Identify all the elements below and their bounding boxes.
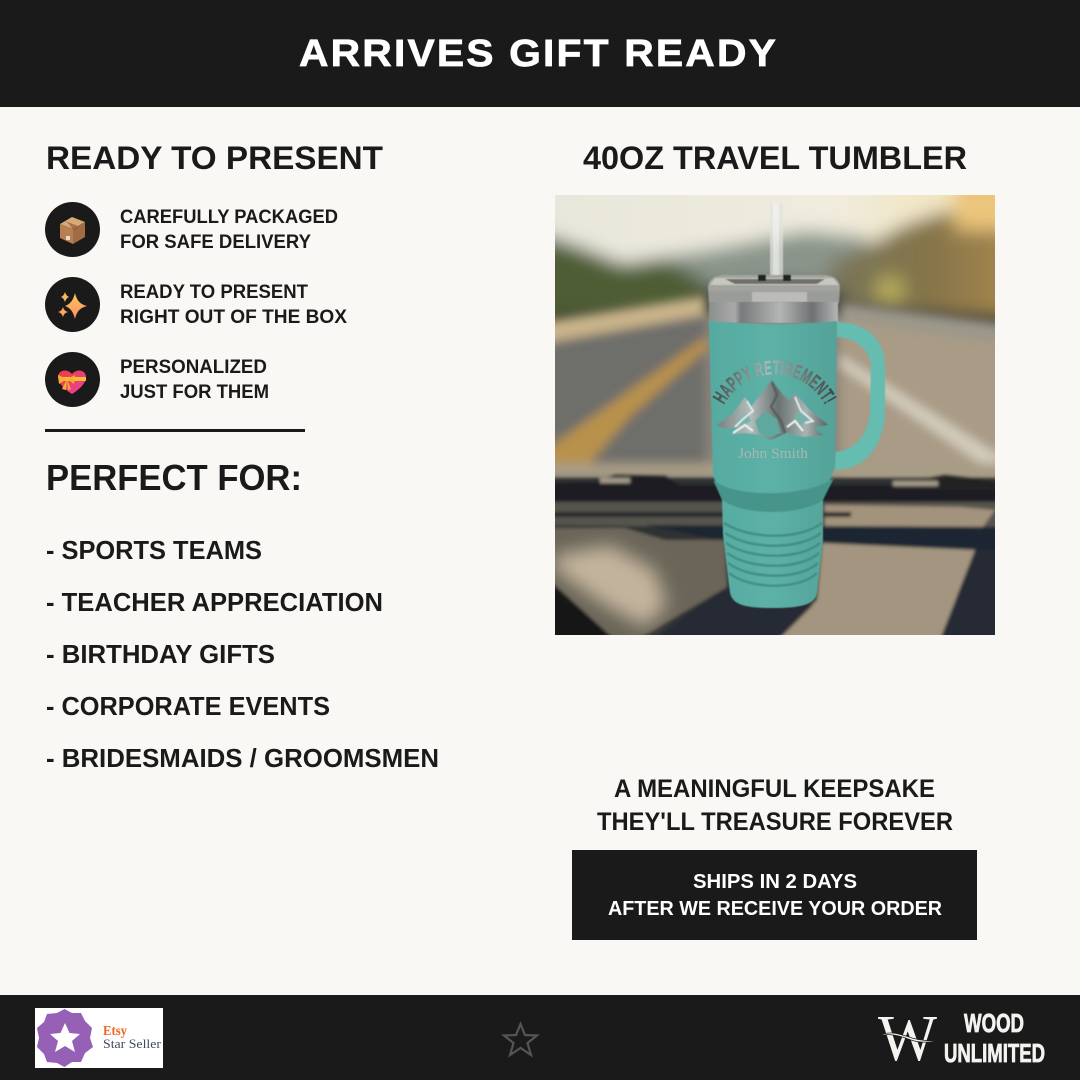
product photo: tumbler on car dashboard [555, 195, 995, 635]
tagline: THEY'LL TREASURE FOREVER [597, 808, 953, 836]
list: occasions: - BRIDESMAIDS / GROOMSMEN [46, 743, 439, 773]
title: ARRIVES GIFT READY [299, 33, 778, 75]
footer bar [0, 995, 1080, 1080]
heading: ready to present: READY TO PRESENT [46, 140, 383, 176]
text: carefully packaged: CAREFULLY PACKAGED [120, 207, 338, 228]
badge: etsy star seller: Etsy [103, 1024, 127, 1039]
text: personalized: PERSONALIZED [120, 357, 267, 378]
icon: outline star [504, 1024, 537, 1055]
text: personalized: JUST FOR THEM [120, 382, 269, 403]
tagline [597, 775, 953, 836]
heading: perfect for: PERFECT FOR: [46, 457, 302, 498]
icon: heart with ribbon [45, 352, 100, 407]
list: occasions: - SPORTS TEAMS [46, 535, 262, 565]
icon: sparkles [45, 277, 100, 332]
straw [770, 203, 783, 293]
text: ready to present [120, 282, 347, 328]
logo wordmark: WOOD [964, 1008, 1024, 1038]
engraved mountains [717, 380, 828, 440]
shipping callout [572, 850, 977, 940]
text: carefully packaged [120, 207, 338, 253]
tumbler steel band [709, 302, 838, 323]
list: occasions: - CORPORATE EVENTS [46, 691, 330, 721]
header banner [0, 0, 1080, 107]
tumbler lid [708, 275, 840, 303]
badge: etsy star seller [35, 1008, 163, 1068]
tumbler engraving [712, 360, 837, 462]
feature: carefully packaged [45, 202, 338, 257]
list: occasions [46, 535, 439, 773]
list: occasions: - TEACHER APPRECIATION [46, 587, 383, 617]
tumbler body [709, 321, 837, 608]
shipping callout: AFTER WE RECEIVE YOUR ORDER [608, 898, 943, 920]
badge: etsy star seller: Star Seller [103, 1036, 162, 1051]
logo: wood unlimited [878, 1002, 1045, 1075]
tumbler handle [835, 322, 885, 470]
heading: 40oz travel tumbler: 40OZ TRAVEL TUMBLER [583, 140, 967, 176]
tagline: A MEANINGFUL KEEPSAKE [614, 775, 935, 803]
engraved text: happy retirement: HAPPY RETIREMENT! [712, 360, 837, 404]
text: ready to present: READY TO PRESENT [120, 282, 308, 303]
logo mark: W: W [878, 1002, 938, 1075]
shipping callout: SHIPS IN 2 DAYS [693, 871, 857, 893]
feature: ready to present [45, 277, 347, 332]
text: ready to present: RIGHT OUT OF THE BOX [120, 307, 347, 328]
icon: package box [45, 202, 100, 257]
feature: personalized [45, 352, 269, 407]
logo wordmark [944, 1008, 1045, 1068]
engraved name: John Smith [738, 446, 809, 462]
text: personalized [120, 357, 269, 403]
text: carefully packaged: FOR SAFE DELIVERY [120, 232, 311, 253]
list: occasions: - BIRTHDAY GIFTS [46, 639, 275, 669]
